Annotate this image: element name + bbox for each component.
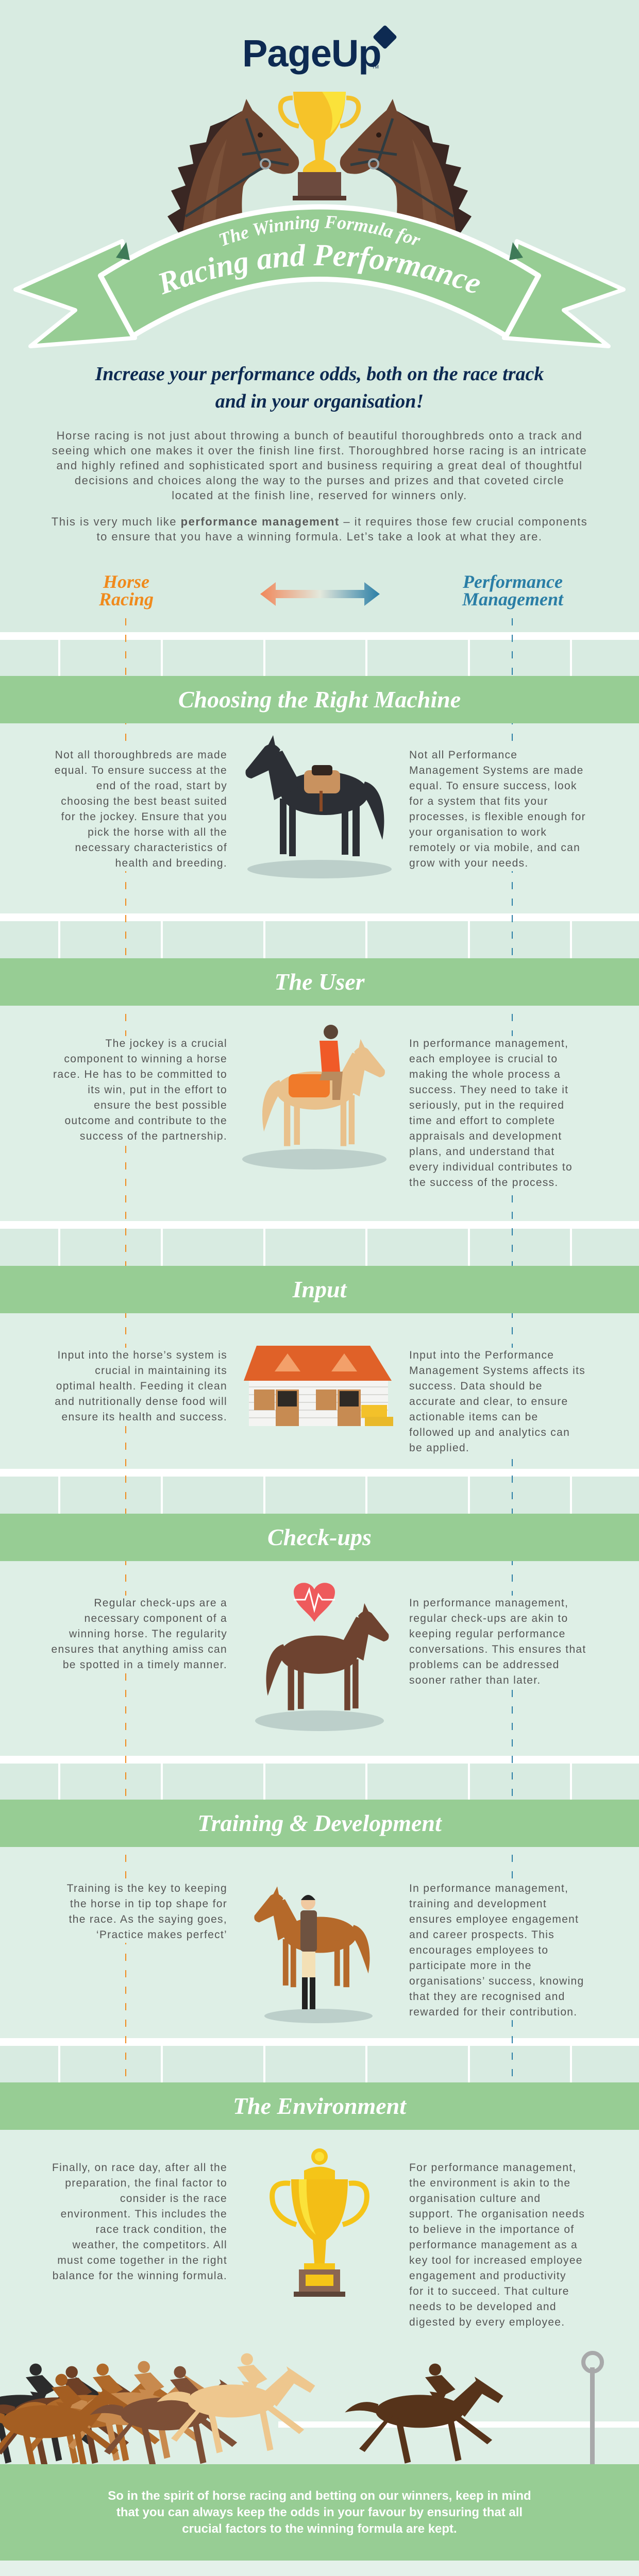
text: training system (409, 1881, 584, 2020)
text: user horse: ensure the best possible (94, 1099, 227, 1111)
text: choosing horse: pick the horse with all the (88, 826, 227, 838)
text: choosing horse: necessary characteristics of (75, 842, 227, 854)
text: choosing system: your organisation to work (409, 826, 547, 838)
text: input system (409, 1348, 585, 1456)
heading: Check-ups: Check-ups (267, 1524, 372, 1550)
text: environment horse: race track condition, the (96, 2224, 227, 2235)
illustration: gold trophy (270, 2148, 369, 2297)
text: environment horse: consider is the race (120, 2193, 227, 2205)
text: input horse: crucial in maintaining its (95, 1365, 227, 1377)
heading: Input (0, 1266, 639, 1313)
text: check-ups system (409, 1596, 586, 1688)
arrow: double-headed (260, 582, 380, 606)
text: input system: success. Data should be (409, 1380, 543, 1392)
text: environment system: performance management as a (409, 2239, 578, 2251)
text: training system: ensures employee engagement (409, 1913, 579, 1925)
label: Performance Management (462, 571, 564, 609)
text: environment horse: must come together in the right (57, 2255, 227, 2266)
text: environment system: support. The organisation needs (409, 2208, 585, 2220)
heading: Choosing the Right Machine (0, 676, 639, 723)
text: check-ups system: sooner rather than later. (409, 1674, 541, 1686)
text: environment system: digested by every employee. (409, 2316, 565, 2328)
text: check-ups system: conversations. This ensures that (409, 1643, 586, 1655)
illustration: jockey on tan horse (242, 1025, 386, 1170)
text: user employee: each employee is crucial to (409, 1053, 558, 1065)
text: training system: In performance management, (409, 1883, 568, 1894)
text: choosing horse: equal. To ensure success at the (55, 765, 227, 776)
ribbon title text: The Winning Formula for (219, 216, 421, 246)
text: input horse: ensure its health and success. (62, 1411, 227, 1423)
text: user employee: appraisals and development (409, 1130, 562, 1142)
text: choosing horse: end of the road, start by (96, 780, 227, 792)
heading: The User: The User (274, 969, 365, 995)
text: training system: participate more in the (409, 1960, 532, 1972)
text: choosing horse: health and breeding. (115, 857, 227, 869)
text: training system: that they are recognised and (409, 1991, 565, 2003)
text: check-ups horse: be spotted in a timely manner. (63, 1659, 227, 1671)
illustration: black horse with saddle (245, 735, 392, 878)
text: training horse: ‘Practice makes perfect’ (96, 1929, 227, 1941)
text: input horse: Input into the horse’s system is (57, 1349, 227, 1361)
text: training horse (67, 1881, 227, 1943)
illustration: trainer with horse (254, 1887, 373, 2023)
text: training system: rewarded for their contribution. (409, 2006, 577, 2018)
text: input system: Management Systems affects its (409, 1365, 585, 1377)
text: choosing system: processes, is flexible enough for (409, 811, 586, 823)
text: choosing horse: Not all thoroughbreds are made (55, 749, 227, 761)
text: environment system: organisation culture and (409, 2193, 541, 2205)
text: training system: and career prospects. This (409, 1929, 554, 1941)
intro text: Horse racing is not just about throwing a bunch of beautiful thoroughbreds onto a track and (57, 429, 582, 442)
icon: right horse head (340, 99, 472, 268)
intro text: located at the finish line, reserved for winners only. (172, 489, 467, 502)
text: training system: encourages employees to (409, 1944, 548, 1956)
text: choosing system: equal. To ensure success, look (409, 780, 577, 792)
subtitle: and in your organisation! (215, 391, 424, 412)
heading: Check-ups (0, 1514, 639, 1561)
label: Horse Racing (99, 571, 154, 609)
text: input system: Input into the Performance (409, 1349, 554, 1361)
text: environment horse: environment. This includes the (61, 2208, 227, 2220)
text: user horse: outcome and contribute to the (64, 1115, 227, 1127)
fences (0, 632, 639, 640)
text: check-ups horse: winning horse. The regularity (69, 1628, 227, 1640)
header illustration: horses, trophy and ribbon (13, 92, 626, 348)
intro text: This is very much like performance management – it requires those few crucial components (52, 515, 587, 528)
text: environment system: needs to be developed and (409, 2301, 557, 2313)
text: user horse: The jockey is a crucial (106, 1038, 227, 1049)
intro text: seeing which one makes it over the finish line first. Thoroughbred horse racing is an intricate (52, 444, 587, 457)
text: training horse: the horse in tip top shape for (70, 1898, 227, 1910)
text: user employee: seriously, put in the required (409, 1099, 564, 1111)
text: environment horse: weather, the competitors. All (73, 2239, 227, 2251)
closing message band: So in the spirit of horse racing and betting on our winners, keep in mind (108, 2489, 531, 2503)
label: Performance Management: Management (462, 589, 563, 609)
text: choosing system: Management Systems are made (409, 765, 584, 776)
text: environment horse: Finally, on race day, after all the (52, 2162, 227, 2174)
text: check-ups system: keeping regular performance (409, 1628, 566, 1640)
illustration: stable (244, 1346, 393, 1426)
closing message band: crucial factors to the winning formula are kept. (182, 2522, 457, 2536)
text: check-ups horse: ensures that anything amiss can (52, 1643, 227, 1655)
text: environment horse: preparation, the final factor to (65, 2177, 227, 2189)
text: input system: actionable items can be (409, 1411, 539, 1423)
text: choosing system: grow with your needs. (409, 857, 529, 869)
intro text: to ensure that you have a winning formula. Let’s take a look at what they are. (96, 530, 543, 543)
heading: Training & Development: Training & Development (197, 1810, 442, 1836)
text: environment system: for it to succeed. That culture (409, 2285, 569, 2297)
text: user horse: component to winning a horse (64, 1053, 227, 1065)
text: user employee: In performance management, (409, 1038, 568, 1049)
label: Horse Racing: Racing (99, 589, 154, 609)
heading: The User (0, 958, 639, 1006)
text: input horse: optimal health. Feeding it clean (56, 1380, 227, 1392)
text: input system: followed up and analytics can (409, 1427, 570, 1438)
illustration: racing horses strip (0, 2351, 639, 2464)
text: training system: training and development (409, 1898, 547, 1910)
text: environment system: key tool for increased employee (409, 2255, 583, 2266)
text: user employee: every individual contributes to (409, 1161, 573, 1173)
text: choosing horse: for the jockey. Ensure that you (61, 811, 227, 823)
text: environment system: For performance management, (409, 2162, 577, 2174)
heading: Training & Development (0, 1800, 639, 1847)
text: user horse: its win, put in the effort to (88, 1084, 227, 1096)
label: Performance Management: Performance (463, 571, 563, 592)
text: check-ups system: regular check-ups are akin to (409, 1613, 568, 1624)
text: user horse (53, 1036, 227, 1144)
text: user employee: success. They need to take it (409, 1084, 568, 1096)
intro text (52, 429, 587, 543)
text: user employee: plans, and understand that (409, 1146, 554, 1158)
icon: left horse head (167, 99, 299, 268)
text: user employee (409, 1036, 573, 1191)
subtitle (95, 363, 544, 412)
text: environment system: engagement and productivity (409, 2270, 566, 2282)
text: training horse: the race. As the saying goes, (69, 1913, 227, 1925)
heading: Input: Input (293, 1276, 346, 1302)
text: training system: organisations’ success, knowing (409, 1975, 584, 1987)
text: input horse (55, 1348, 227, 1425)
closing message band (0, 2464, 639, 2561)
text: choosing system: Not all Performance (409, 749, 517, 761)
text: choosing system (409, 748, 586, 871)
text: user horse: race. He has to be committed to (53, 1069, 227, 1080)
text: input system: accurate and clear, to ensure (409, 1396, 568, 1408)
text: input system: be applied. (409, 1442, 469, 1454)
section backgrounds (0, 723, 639, 913)
text: check-ups horse: Regular check-ups are a (94, 1597, 227, 1609)
text: choosing system: remotely or via mobile, and can (409, 842, 580, 854)
text: check-ups system: In performance management, (409, 1597, 568, 1609)
text: user employee: time and effort to complete (409, 1115, 555, 1127)
text: environment horse (52, 2160, 227, 2284)
text: environment system: to believe in the importance of (409, 2224, 574, 2235)
intro text: decisions and choices along the way to the purses and prizes and that coveted circle (75, 474, 564, 487)
text: user employee: making the whole process a (409, 1069, 561, 1080)
illustration: racecourse scene with jockey (0, 2561, 639, 2576)
heading: Choosing the Right Machine: Choosing the Right Machine (178, 686, 461, 713)
text: check-ups horse: necessary component of a (84, 1613, 227, 1624)
text: choosing horse: choosing the best beast suited (61, 795, 227, 807)
subtitle: Increase your performance odds, both on the race track (95, 363, 544, 385)
text: check-ups horse (52, 1596, 227, 1673)
text: check-ups system: problems can be addressed (409, 1659, 560, 1671)
logo: PageUp: TM (372, 64, 379, 70)
label: Horse Racing: Horse (103, 571, 149, 592)
text: choosing horse (55, 748, 227, 871)
ribbon banner (13, 204, 626, 348)
text: environment system: the environment is akin to the (409, 2177, 570, 2189)
text: user employee: the success of the process. (409, 1177, 559, 1189)
text: environment horse: balance for the winning formula. (53, 2270, 227, 2282)
heading: The Environment (0, 2082, 639, 2130)
text: choosing system: for a system that fits your (409, 795, 548, 807)
illustration: heart and brown horse (255, 1583, 389, 1731)
icon: trophy (280, 92, 359, 200)
closing message band: that you can always keep the odds in your favour by ensuring that all (116, 2505, 523, 2519)
text: environment system (409, 2160, 585, 2330)
text: input horse: and nutritionally dense food will (55, 1396, 227, 1408)
logo: PageUp: PageUp (242, 32, 381, 75)
intro text: and highly refined and sophisticated sport and business requiring a great deal of thoughtful (56, 459, 583, 472)
text: user horse: success of the partnership. (80, 1130, 227, 1142)
text: training horse: Training is the key to keeping (67, 1883, 227, 1894)
heading: The Environment: The Environment (233, 2093, 406, 2119)
ribbon banner: Racing and Performance (159, 244, 480, 295)
